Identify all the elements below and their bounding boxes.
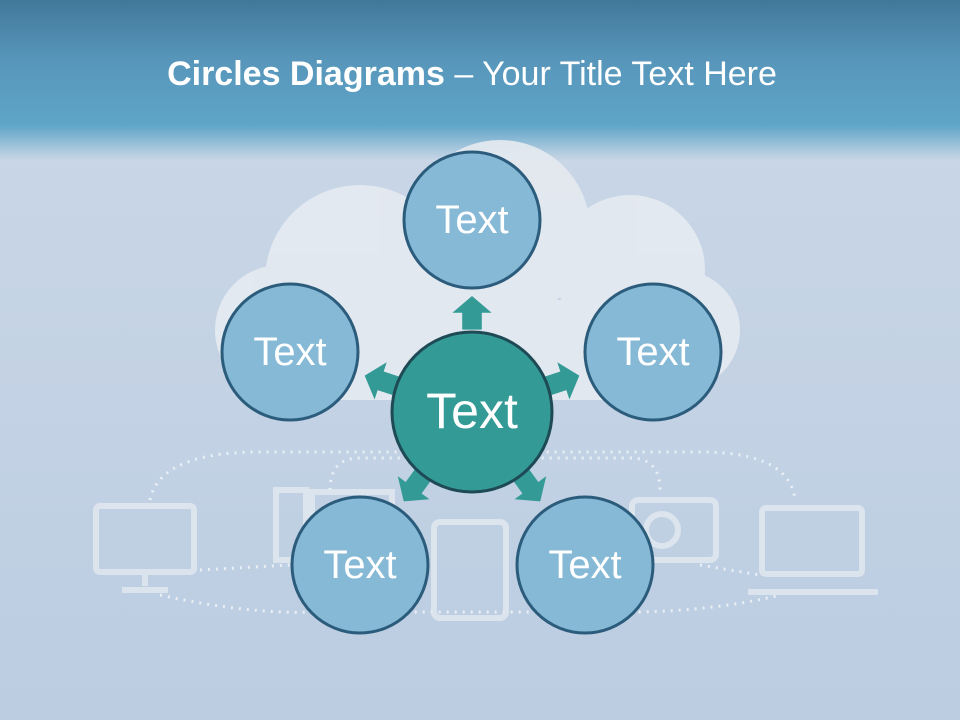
circle labels: Text xyxy=(323,543,397,587)
circle labels xyxy=(253,198,690,587)
arrows xyxy=(359,296,585,513)
outer circles xyxy=(222,152,721,633)
circle labels: Text xyxy=(435,198,509,242)
circle labels: Text xyxy=(253,330,327,374)
circle labels: Text xyxy=(616,330,690,374)
devices xyxy=(96,490,878,618)
header band xyxy=(0,0,960,160)
title: Circles Diagrams – Your Title Text Here xyxy=(167,55,777,93)
center circle xyxy=(392,332,552,492)
circle labels: Text xyxy=(548,543,622,587)
dotted network loop xyxy=(150,452,795,612)
background cloud xyxy=(215,140,740,400)
circle labels: Text xyxy=(426,383,518,439)
